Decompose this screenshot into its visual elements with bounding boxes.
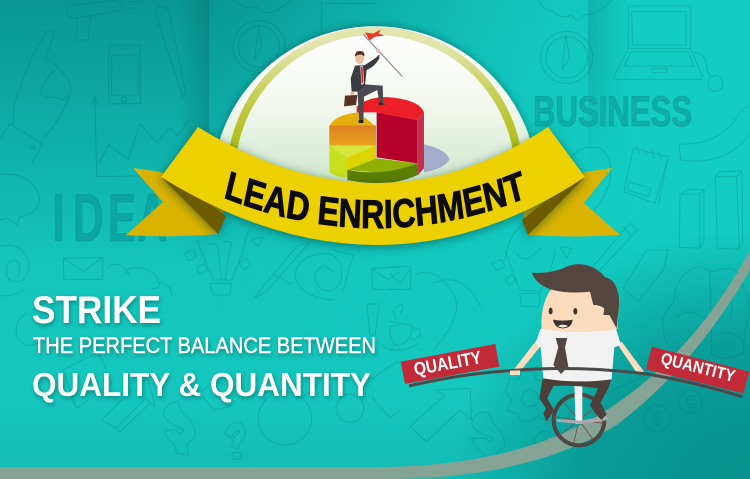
- unicycle wheel: [554, 385, 608, 445]
- headline text: [32, 289, 376, 403]
- doodles: left panel: [0, 0, 375, 225]
- chart: line doodle: [92, 97, 190, 177]
- chart: pie with businessman: [329, 29, 449, 183]
- jacket: [351, 54, 379, 92]
- icon: envelope: [63, 257, 103, 279]
- icon: brain left: [415, 273, 481, 350]
- icon: envelope: [390, 267, 411, 289]
- icon: envelope: [372, 267, 400, 289]
- arms: [514, 340, 644, 373]
- icon: notebook: [624, 147, 668, 205]
- doodle letter behind dome: B: [224, 78, 254, 125]
- icon: cloud: [235, 0, 290, 13]
- legs: [539, 378, 612, 422]
- shirt: [536, 329, 621, 381]
- ring: [232, 31, 518, 158]
- icon: briefcase right: [370, 362, 400, 418]
- dome: [219, 26, 531, 200]
- doodle word: BUSINESS: BUSINESS: [533, 88, 692, 136]
- headline: quality and quantity: QUALITY & QUANTITY: [32, 366, 371, 403]
- head: [532, 264, 619, 332]
- doodle word: IDEA: IDEA: [53, 180, 167, 255]
- head: [355, 53, 364, 64]
- icon: laptop: [614, 6, 713, 79]
- icon: brain right: [663, 267, 749, 358]
- briefcase: [344, 95, 357, 106]
- doodles: lower right: [390, 250, 749, 463]
- icon: curved arrow: [679, 105, 750, 161]
- icon: magnifier: [258, 392, 312, 445]
- label: quantity: QUANTITY: [659, 349, 737, 386]
- label: quality: QUALITY: [412, 346, 483, 379]
- icon: pointing hand: [0, 31, 71, 163]
- icon: speech bubble: [0, 174, 39, 225]
- icon: megaphone: [67, 1, 140, 40]
- icon: compass clock: [541, 31, 593, 83]
- businessman: [344, 29, 402, 123]
- icon: euro coin: [679, 390, 702, 413]
- icon: phone: [109, 45, 141, 104]
- icon: gear: [505, 372, 547, 422]
- icon: question mark: [225, 423, 245, 450]
- icon: coin: [336, 394, 364, 422]
- right tail: [522, 168, 620, 236]
- icon: pencil: [590, 223, 637, 270]
- red slice: [357, 97, 424, 176]
- orange slice: [329, 112, 376, 146]
- icon: pen: [155, 3, 186, 97]
- pie shadow: [424, 144, 449, 172]
- icon: compass clock: [233, 21, 285, 73]
- headline: strike: STRIKE: [32, 289, 161, 332]
- lime slice: [329, 146, 376, 178]
- legs: [357, 84, 383, 122]
- balance pole: [409, 368, 742, 397]
- icon: tablet: [607, 373, 653, 417]
- icon: question mark: [533, 431, 555, 457]
- grey curve band: [0, 250, 750, 479]
- icon: light bulb: [197, 230, 248, 295]
- ribbon body: [161, 127, 585, 245]
- icon: phone: [623, 250, 668, 302]
- ribbon banner: [126, 126, 620, 253]
- flag: [363, 34, 402, 77]
- doodles: lower left: [0, 230, 400, 459]
- chart: 3D bars: [679, 171, 743, 249]
- icon: lamp: [505, 222, 572, 260]
- icon: gear: [200, 382, 240, 410]
- icon: dollar sign: [472, 412, 505, 463]
- badge: [219, 26, 531, 200]
- tie: [553, 338, 568, 374]
- icon: exclamation: [367, 304, 379, 335]
- icon: briefcase: [63, 352, 112, 408]
- icon: dollar sign: [163, 402, 195, 455]
- icon: coffee cup: [390, 304, 420, 350]
- left tail: [126, 168, 225, 236]
- icon: @ sign large: [295, 250, 353, 300]
- icon: light bulb: [505, 250, 555, 307]
- squiggle: [107, 264, 172, 297]
- hand: [510, 370, 520, 375]
- icon: @ sign: [0, 245, 29, 296]
- icon: dollar coin: [644, 405, 671, 432]
- icon: paper: [322, 2, 375, 33]
- headline: perfect balance: THE PERFECT BALANCE BETWEEN: [33, 333, 376, 358]
- icon: phone receiver: [16, 313, 37, 346]
- icon: @ sign: [570, 147, 611, 213]
- green slice: [347, 158, 417, 183]
- doodles: right panel: [505, 0, 750, 270]
- icon: cloud: [538, 0, 612, 20]
- banner title: LEAD ENRICHMENT: [224, 170, 522, 229]
- icon: pencil: [253, 242, 310, 298]
- icon: arrow: [102, 380, 155, 432]
- unicyclist balancing quality and quantity: [401, 264, 749, 445]
- icon: coffee: [382, 325, 400, 349]
- icon: arrow: [410, 388, 472, 442]
